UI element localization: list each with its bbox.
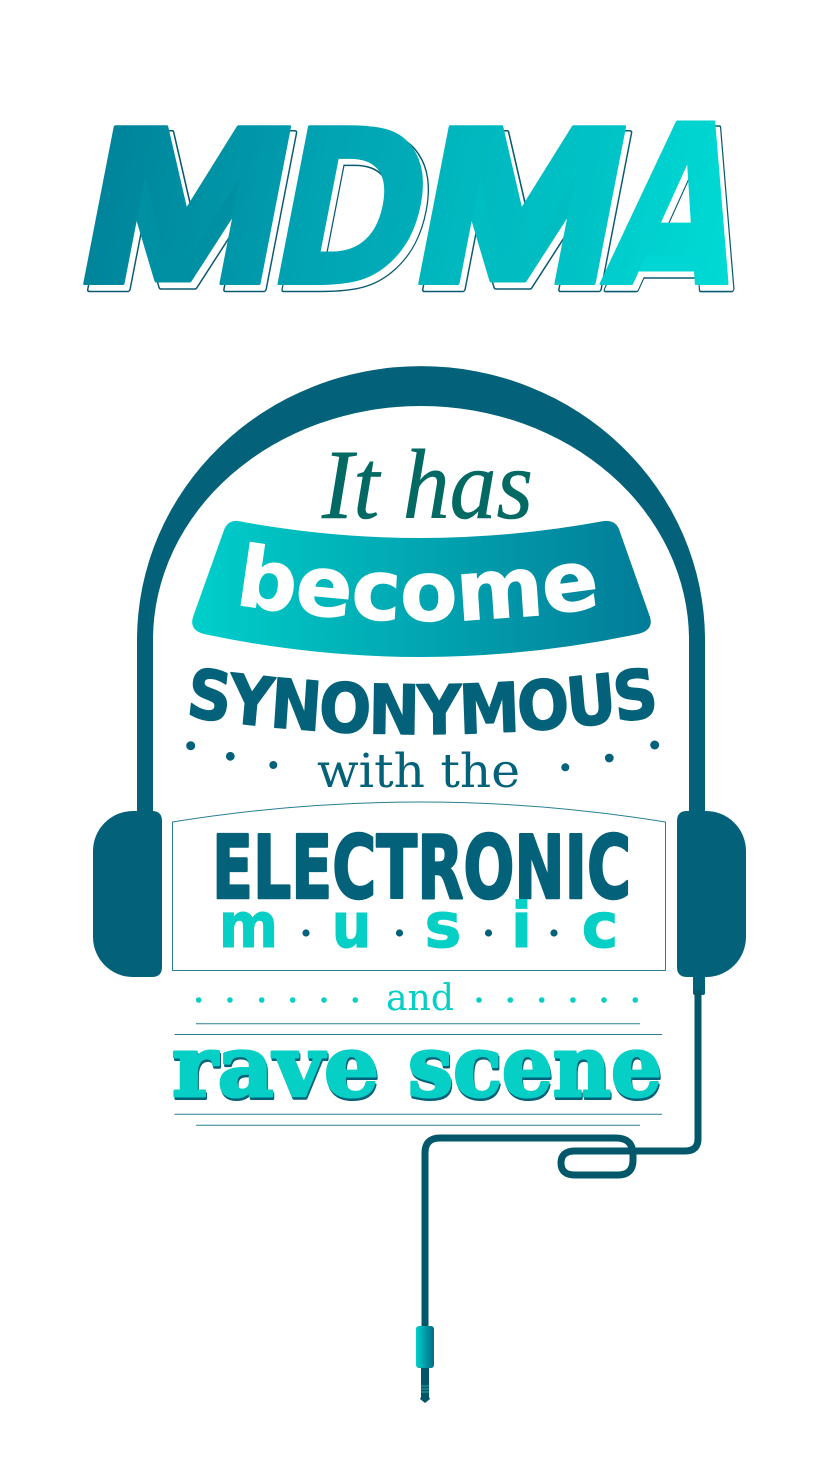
jack rings: [421, 1386, 429, 1392]
rave scene shadow: [173, 1020, 663, 1118]
text: with the: with the: [317, 744, 520, 799]
text: music: u: [332, 889, 371, 962]
text: rave scene: [172, 1017, 663, 1118]
dots between music letters: [302, 929, 558, 937]
rave scene shadow: rave: [173, 1020, 380, 1118]
frame around electronic music: [172, 802, 666, 970]
title outline shadow: M: [395, 91, 657, 341]
title white gap: M: [60, 91, 322, 341]
title outline shadow: M: [60, 91, 322, 341]
title gradient letters: A: [590, 78, 768, 336]
title gradient letters: [55, 78, 768, 336]
banner: [192, 521, 651, 657]
title outline shadow: [60, 84, 773, 342]
text: music: i: [511, 889, 532, 962]
dotted row left of and: [196, 997, 358, 1003]
cable stub: [693, 975, 705, 995]
jack tip: [420, 1397, 430, 1403]
rave scene face: [172, 1017, 662, 1116]
text: It has: It has: [321, 429, 533, 540]
text: SYNONYMOUS: SYNONYMOUS: [190, 668, 654, 735]
rave scene face: rave: [172, 1017, 379, 1116]
title gradient letters: M: [55, 85, 317, 335]
audio jack: [416, 1326, 434, 1403]
title: MDMA: [55, 78, 773, 342]
title white gap: M: [395, 91, 657, 341]
text: music: s: [425, 889, 461, 962]
rave scene shadow: scene: [409, 1020, 663, 1118]
title gradient letters: M: [390, 85, 652, 335]
cable: [425, 990, 698, 1330]
title outline shadow: A: [595, 84, 773, 342]
text: ELECTRONIC: ELECTRONIC: [212, 817, 631, 919]
title white gap: [60, 84, 773, 342]
text: music: m: [219, 891, 278, 963]
title outline shadow: D: [257, 90, 457, 341]
jack sleeve: [416, 1326, 434, 1368]
jack shaft: [421, 1366, 429, 1398]
left ear cup: [93, 811, 162, 977]
title white gap: D: [257, 90, 457, 341]
headphones: [93, 366, 746, 1403]
text: become: become: [240, 542, 596, 622]
title white gap: A: [595, 84, 773, 342]
text: music: [219, 889, 618, 963]
dotted row right of and: [476, 997, 638, 1003]
text: music: c: [582, 889, 618, 962]
title gradient letters: D: [252, 84, 452, 335]
headband: [137, 366, 705, 815]
dotted row left and right of with the: [186, 740, 659, 771]
right ear cup: [677, 811, 746, 977]
text: and: and: [386, 978, 454, 1019]
rave scene face: scene: [408, 1017, 662, 1116]
